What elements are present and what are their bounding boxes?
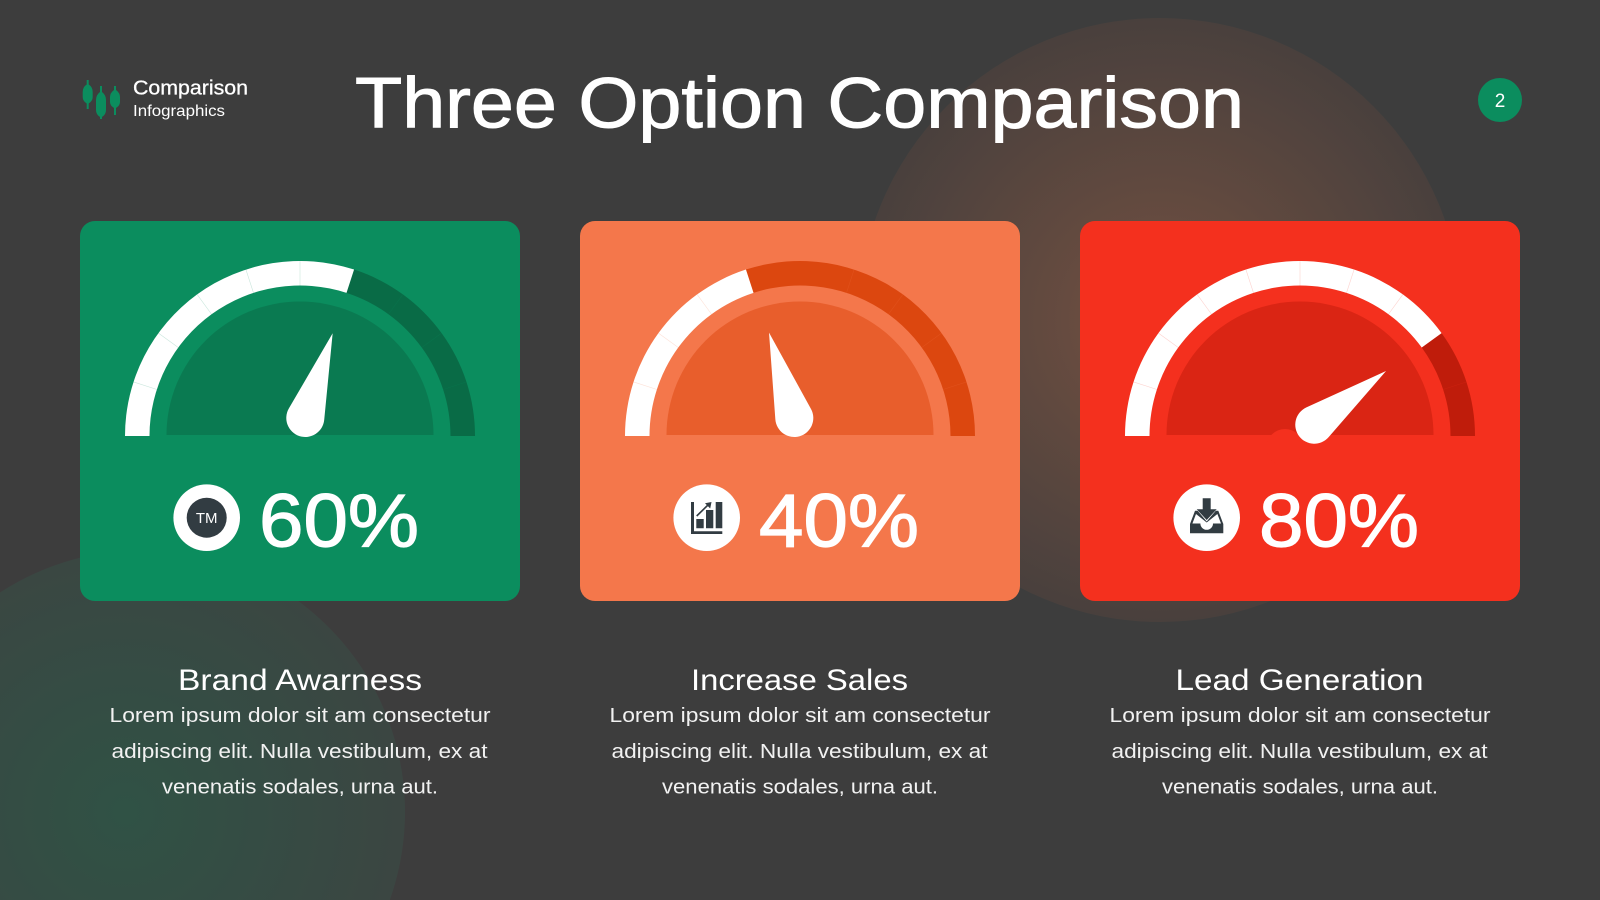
- gauge fill: 40 percent: [625, 270, 754, 436]
- gauge fill: 60 percent: [125, 261, 354, 436]
- description: venenatis sodales, urna aut.: [162, 776, 438, 798]
- heading: Brand Awarness: [178, 664, 422, 697]
- logo: [83, 76, 248, 120]
- panel: Increase Sales card: [580, 221, 1020, 601]
- page number badge: [1478, 78, 1522, 122]
- description: Lorem ipsum dolor sit am consectetur: [110, 704, 491, 727]
- page number badge: 2: [1495, 91, 1505, 112]
- description: Lorem ipsum dolor sit am consectetur: [610, 704, 991, 727]
- gauge track: remaining: [1422, 333, 1475, 436]
- icon: rising bar chart: [673, 484, 740, 551]
- icon: trademark: TM: [196, 510, 218, 527]
- icon: inbox download: [1173, 484, 1240, 551]
- gauge dial: [1166, 302, 1434, 435]
- value: 40%: 40%: [759, 478, 919, 562]
- description: venenatis sodales, urna aut.: [662, 776, 938, 798]
- text block: Lead Generation: [1110, 664, 1491, 798]
- panel: Brand Awarness card: [80, 221, 520, 601]
- value: 80%: 80%: [1259, 478, 1419, 562]
- background circle: orange: [858, 18, 1462, 622]
- description: [110, 704, 491, 798]
- description: [610, 704, 991, 798]
- heading: Increase Sales: [691, 664, 908, 697]
- gauge dial: [666, 302, 934, 435]
- description: adipiscing elit. Nulla vestibulum, ex at: [1112, 740, 1488, 763]
- text block: Increase Sales: [610, 664, 991, 798]
- gauge: 60%: [125, 261, 475, 442]
- gauge: 40%: [625, 261, 975, 442]
- description: adipiscing elit. Nulla vestibulum, ex at: [612, 740, 988, 763]
- background circle: green: [0, 550, 405, 900]
- gauge: 80%: [1125, 261, 1475, 466]
- icon: candlesticks: [83, 80, 120, 119]
- logo text: Comparison: Comparison: [133, 76, 248, 100]
- needle: [751, 327, 818, 442]
- panel: Lead Generation card: [1080, 221, 1520, 601]
- heading: Lead Generation: [1176, 664, 1424, 697]
- description: Lorem ipsum dolor sit am consectetur: [1110, 704, 1491, 727]
- title: Three Option Comparison: [355, 64, 1244, 144]
- gauge track: remaining: [746, 261, 975, 436]
- needle: [281, 327, 351, 442]
- description: adipiscing elit. Nulla vestibulum, ex at: [112, 740, 488, 763]
- logo text: Infographics: Infographics: [133, 103, 225, 120]
- value: 60%: 60%: [259, 478, 419, 562]
- gauge track: remaining: [346, 270, 475, 436]
- gauge dial: [166, 302, 434, 435]
- description: venenatis sodales, urna aut.: [1162, 776, 1438, 798]
- description: [1110, 704, 1491, 798]
- needle: [1288, 356, 1397, 451]
- text block: Brand Awarness: [110, 664, 491, 798]
- gauge fill: 80 percent: [1125, 261, 1442, 436]
- icon: trademark: [173, 484, 240, 551]
